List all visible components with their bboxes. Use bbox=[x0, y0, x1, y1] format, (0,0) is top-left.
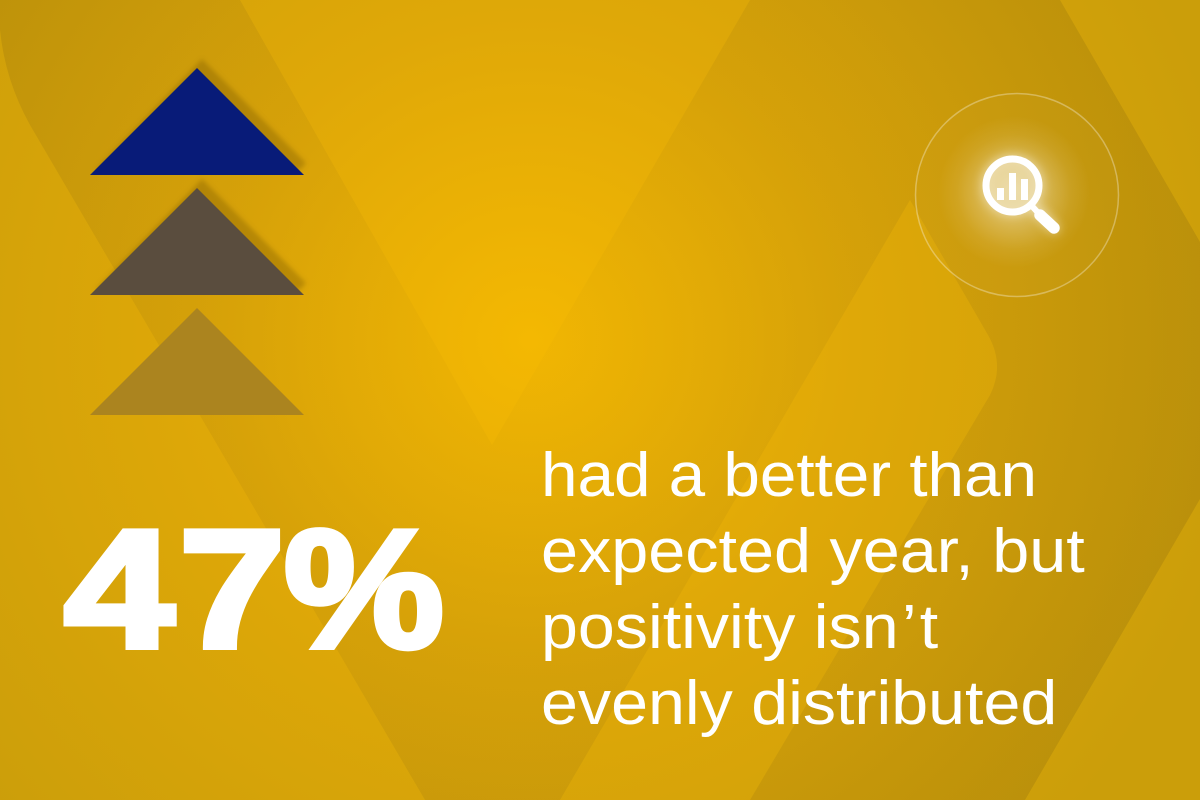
statistic: 47%: 7 bbox=[179, 494, 285, 682]
description text: had a better than bbox=[540, 441, 1037, 510]
description text bbox=[540, 441, 1084, 738]
description text: positivity isn’t bbox=[540, 593, 938, 662]
triangle: navy bbox=[90, 59, 306, 175]
description text: expected year, but bbox=[540, 517, 1084, 586]
description text: evenly distributed bbox=[540, 669, 1057, 738]
triangle: grey-brown bbox=[90, 179, 306, 295]
statistic: 47% bbox=[63, 494, 444, 682]
icon: magnifier in circle bbox=[916, 94, 1118, 296]
statistic: 47%: % bbox=[284, 494, 444, 682]
triangle: faint bbox=[90, 308, 304, 415]
statistic: 47%: 4 bbox=[64, 494, 174, 682]
